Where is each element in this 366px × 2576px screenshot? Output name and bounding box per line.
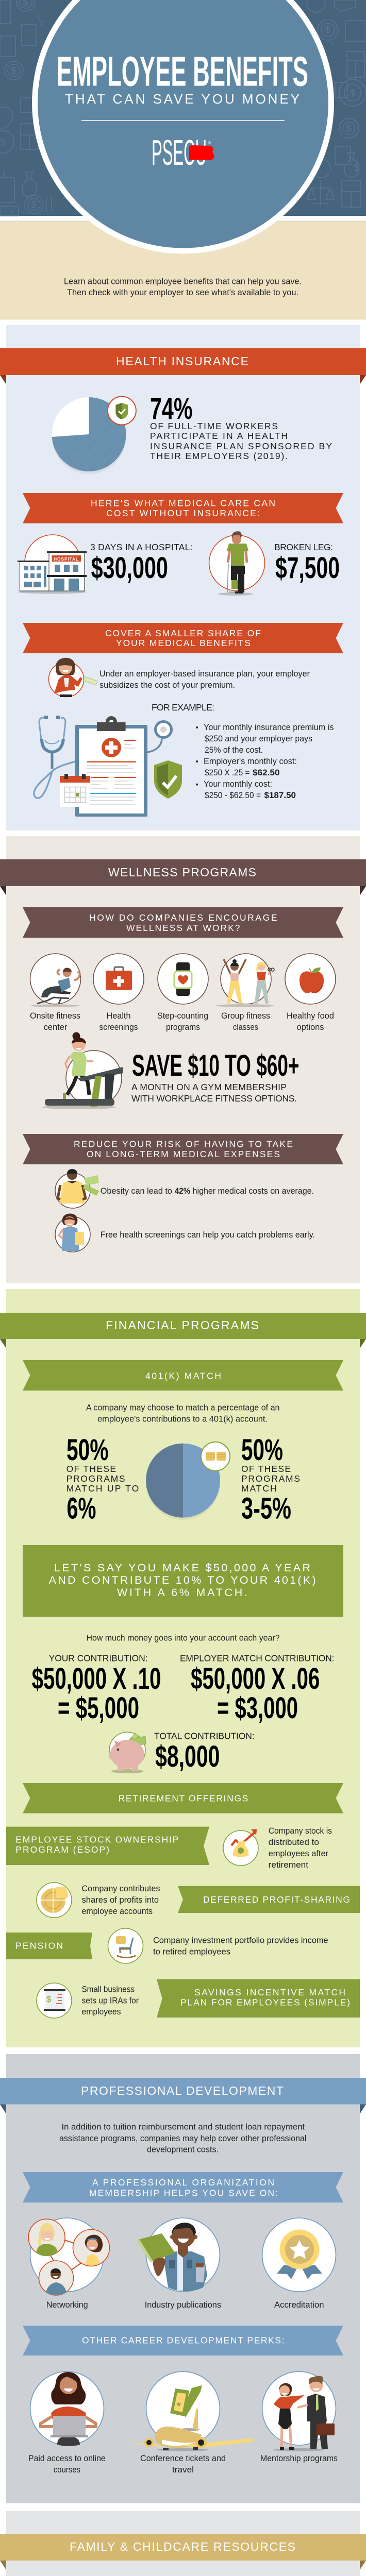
text: obesity cost: higher medical costs on average. — [193, 1187, 314, 1196]
subtitle: THAT CAN SAVE YOU MONEY — [65, 91, 300, 107]
pie chart: 50 50 — [146, 1444, 220, 1520]
labels: career perks — [28, 2454, 338, 2475]
example calculation list — [196, 723, 334, 800]
stat: match up to 6 percent: PROGRAMS — [66, 1473, 125, 1484]
labels: membership savings: Networking — [46, 2300, 88, 2310]
banner: membership helps — [23, 2172, 343, 2202]
labels: career perks: travel — [172, 2465, 194, 2475]
banner: other career perks: OTHER CAREER DEVELOPMENT PERKS: — [82, 2335, 285, 2346]
ribbon: family and childcare — [0, 2534, 366, 2570]
ribbon: professional development — [0, 2078, 366, 2114]
intro background — [0, 221, 366, 320]
example calculation list: $250 - $62.50 = — [205, 791, 261, 800]
wellness option labels: Onsite fitness — [30, 1011, 80, 1021]
illustration: clipboard — [75, 716, 147, 817]
header banner: $ — [0, 137, 6, 148]
banner: other career perks — [23, 2326, 343, 2355]
tag: pension: PENSION — [15, 1941, 63, 1951]
hospital cost: 3 DAYS IN A HOSPITAL: — [90, 542, 193, 552]
text: question: How much money goes into your account each year? — [87, 1633, 279, 1642]
icon: money bag with rising arrow — [223, 1829, 258, 1866]
text: profit sharing description — [81, 1884, 160, 1916]
labels: membership savings: Industry publications — [145, 2300, 221, 2310]
ribbon: financial programs — [0, 1313, 366, 1348]
wellness option labels: screenings — [99, 1023, 138, 1032]
stat: match up to 6 percent: 50% — [66, 1433, 108, 1467]
icon: step-counting watch — [158, 954, 208, 1004]
header banner: $ — [31, 199, 37, 211]
banner: retirement offerings: RETIREMENT OFFERINGS — [119, 1793, 248, 1804]
icon: group fitness classes — [215, 954, 274, 1007]
banner: 401(k) match: 401(K) MATCH — [145, 1371, 221, 1381]
example calculation list: Employer's monthly cost: — [204, 757, 297, 766]
icon: man with broken leg — [209, 531, 265, 596]
calculation: employer contribution — [180, 1653, 334, 1725]
banner: medical care cost: HERE'S WHAT MEDICAL CARE CAN — [91, 498, 275, 508]
tag: deferred profit-sharing: DEFERRED PROFIT-SHARING — [203, 1894, 350, 1905]
text: professional development intro: assistance programs, companies may help cover other professional — [59, 2134, 306, 2143]
stat: total contribution: $8,000 — [155, 1740, 220, 1773]
text: professional development intro: development costs. — [147, 2145, 219, 2155]
stat: 74 percent — [150, 392, 332, 461]
banner: retirement offerings — [23, 1783, 343, 1814]
banner: smaller share: YOUR MEDICAL BENEFITS — [116, 638, 251, 648]
text: professional development intro — [59, 2122, 306, 2155]
calculation: employer contribution: = $3,000 — [217, 1691, 298, 1725]
text: obesity cost: Obesity can lead to — [101, 1187, 172, 1196]
text: obesity cost — [101, 1187, 314, 1196]
calculation: your contribution: $50,000 X .10 — [32, 1662, 161, 1696]
hospital cost: $30,000 — [91, 551, 168, 585]
example calculation list: $250 and your employer pays — [205, 734, 312, 743]
illustration: stethoscope — [34, 716, 171, 798]
banner: 401(k) match — [23, 1360, 343, 1391]
panel: family and childcare — [0, 2511, 366, 2576]
icon: IRA chart board — [37, 1983, 72, 2018]
labels: career perks: Mentorship programs — [260, 2454, 338, 2463]
tag: ESOP: EMPLOYEE STOCK OWNERSHIP — [15, 1835, 178, 1845]
text: ESOP description: employees after — [269, 1849, 328, 1858]
banner: reduce risk: REDUCE YOUR RISK OF HAVING TO TAKE — [74, 1139, 293, 1149]
callout: example contribution: WITH A 6% MATCH. — [117, 1586, 247, 1599]
broken leg cost: $7,500 — [275, 551, 340, 585]
labels: membership savings: Accreditation — [274, 2300, 324, 2310]
banner: encourage wellness: WELLNESS AT WORK? — [126, 923, 240, 933]
wellness option labels: Health — [106, 1011, 131, 1021]
PSECU logo: PSECU — [152, 132, 207, 173]
icon: woman with laptop — [30, 2371, 104, 2446]
stat: match up to 6 percent: 6% — [67, 1492, 96, 1525]
wellness option labels: Healthy food — [287, 1011, 334, 1021]
banner: reduce risk — [23, 1134, 343, 1164]
stat: match up to 6 percent — [66, 1433, 139, 1525]
text: 401(k) description — [86, 1403, 279, 1424]
stat: match 3-5 percent: MATCH — [241, 1483, 277, 1494]
header banner: $ — [354, 162, 359, 174]
calculation: your contribution: = $5,000 — [58, 1691, 139, 1725]
ribbon: health insurance — [0, 348, 366, 384]
text: ESOP description — [269, 1826, 332, 1870]
text: professional development intro: In addition to tuition reimbursement and student loan repayment — [62, 2122, 305, 2131]
icon: woman with cheque — [48, 658, 97, 697]
ribbon: family and childcare: FAMILY & CHILDCARE RESOURCES — [70, 2540, 295, 2553]
broken leg cost — [274, 542, 340, 585]
header banner — [0, 0, 366, 216]
icon: shield badge — [108, 397, 136, 425]
header banner: $ — [346, 123, 352, 134]
example calculation list: Your monthly insurance premium is — [204, 723, 334, 732]
labels: membership savings — [46, 2300, 324, 2310]
text: pension description: Company investment portfolio provides income — [153, 1936, 328, 1945]
pie chart: 74 percent — [52, 397, 126, 474]
text: SIMPLE description — [81, 1985, 139, 2016]
banner: encourage wellness — [23, 907, 343, 938]
text: SIMPLE description: employees — [81, 2007, 121, 2016]
wellness option labels — [30, 1011, 334, 1032]
icon: hospital — [18, 535, 87, 594]
header banner: $ — [350, 88, 355, 99]
icon: coins badge — [201, 1442, 230, 1471]
icon: conference tickets and plane — [127, 2371, 254, 2451]
tag: SIMPLE: SAVINGS INCENTIVE MATCH — [194, 1987, 345, 1997]
tag: SIMPLE: PLAN FOR EMPLOYEES (SIMPLE) — [180, 1997, 350, 2007]
text: employer subsidy: subsidizes the cost of your premium. — [99, 681, 235, 690]
text: 401(k) description: employee's contributions to a 401(k) account. — [97, 1415, 268, 1424]
calculation: your contribution: YOUR CONTRIBUTION: — [49, 1653, 148, 1664]
wellness option labels: programs — [166, 1023, 200, 1032]
text: pension description — [153, 1936, 328, 1957]
text: employer subsidy — [99, 669, 310, 690]
PSECU logo — [152, 132, 214, 173]
stat: match 3-5 percent: 50% — [241, 1433, 283, 1467]
wellness option labels: center — [43, 1023, 68, 1032]
text: profit sharing description: shares of profits into — [81, 1895, 159, 1905]
text: obesity cost: 42% — [175, 1187, 190, 1196]
wellness option labels: options — [297, 1023, 324, 1032]
stat: 74 percent: THEIR EMPLOYERS (2019). — [150, 451, 288, 461]
stat: match 3-5 percent: OF THESE — [241, 1464, 291, 1474]
callout: example contribution — [23, 1545, 343, 1617]
illustration: shield — [154, 760, 182, 799]
text: profit sharing description: Company contributes — [81, 1884, 160, 1893]
wellness option labels: Step-counting — [157, 1011, 208, 1021]
banner: reduce risk: ON LONG-TERM MEDICAL EXPENSES — [87, 1149, 280, 1159]
title circle — [32, 0, 334, 253]
example calculation list: Your monthly cost: — [204, 779, 272, 789]
text: pension description: to retired employees — [153, 1947, 230, 1957]
stat: total contribution: TOTAL CONTRIBUTION: — [154, 1731, 255, 1741]
labels: career perks: courses — [54, 2465, 80, 2475]
stat: match 3-5 percent — [241, 1433, 300, 1525]
text: 401(k) description: A company may choose to match a percentage of an — [86, 1403, 279, 1413]
icon: conference tickets and plane: ★ — [176, 2400, 182, 2408]
intro text — [64, 277, 302, 297]
banner: encourage wellness: HOW DO COMPANIES ENCOURAGE — [89, 912, 277, 923]
ribbon: wellness programs — [0, 859, 366, 895]
intro text: Learn about common employee benefits that can help you save. — [64, 277, 302, 286]
label: for example: FOR EXAMPLE: — [152, 702, 214, 713]
icon: coin pie — [37, 1883, 72, 1918]
stat: match 3-5 percent: PROGRAMS — [241, 1473, 300, 1484]
banner: membership helps: A PROFESSIONAL ORGANIZATION — [92, 2177, 274, 2188]
callout: example contribution: LET'S SAY YOU MAKE $50,000 A YEAR — [54, 1562, 310, 1574]
banner: medical care cost: COST WITHOUT INSURANCE: — [106, 508, 260, 518]
intro text: Then check with your employer to see what's available to you. — [67, 288, 298, 297]
stat: 74 percent: INSURANCE PLAN SPONSORED BY — [150, 441, 332, 451]
stat: gym savings — [131, 1049, 299, 1104]
banner: smaller share — [23, 623, 343, 653]
illustration: woman on treadmill — [42, 1032, 123, 1109]
text: employer subsidy: Under an employer-based insurance plan, your employer — [99, 669, 310, 679]
header banner: $ — [325, 25, 330, 36]
example calculation list: 25% of the cost. — [205, 745, 263, 755]
illustration: calendar — [60, 774, 90, 807]
calculation: employer contribution: EMPLOYER MATCH CONTRIBUTION: — [180, 1653, 334, 1664]
icon: health screenings kit — [93, 954, 144, 1004]
icon: IRA chart board: $ — [46, 1994, 52, 2004]
callout: example contribution: AND CONTRIBUTE 10% TO YOUR 401(K) — [49, 1574, 316, 1586]
tag: ESOP — [6, 1827, 209, 1865]
icon: rocking chair with coins — [108, 1928, 143, 1963]
banner: medical care cost — [23, 493, 343, 523]
text: ESOP description: Company stock is — [269, 1826, 332, 1836]
stat: 74 percent: 74% — [150, 392, 193, 426]
wellness option labels: classes — [233, 1023, 258, 1032]
icon: nurse — [55, 1214, 90, 1252]
icon: piggy bank with cash — [109, 1732, 146, 1773]
stat: gym savings: WITH WORKPLACE FITNESS OPTIONS. — [131, 1093, 297, 1104]
broken leg cost: BROKEN LEG: — [274, 542, 333, 552]
ribbon: financial programs: FINANCIAL PROGRAMS — [106, 1318, 259, 1332]
icon: man with money — [55, 1169, 99, 1208]
icon: healthy food apple — [285, 954, 336, 1004]
icon: accreditation medal — [262, 2218, 336, 2292]
calculation: your contribution — [32, 1653, 161, 1725]
ribbon: wellness programs: WELLNESS PROGRAMS — [108, 866, 256, 879]
banner: smaller share: COVER A SMALLER SHARE OF — [105, 628, 261, 638]
text: free screenings: Free health screenings can help you catch problems early. — [101, 1230, 315, 1240]
tag: SIMPLE — [157, 1979, 360, 2018]
ribbon: professional development: PROFESSIONAL DEVELOPMENT — [81, 2084, 284, 2097]
text: profit sharing description: employee accounts — [81, 1907, 153, 1916]
icon: mentorship pair — [262, 2371, 336, 2451]
banner: membership helps: MEMBERSHIP HELPS YOU SAVE ON: — [89, 2188, 278, 2198]
stat: 74 percent: OF FULL-TIME WORKERS — [150, 421, 278, 431]
stat: match up to 6 percent: MATCH UP TO — [66, 1483, 139, 1494]
panel: professional development — [0, 2054, 366, 2503]
labels: career perks: Paid access to online — [28, 2454, 106, 2463]
panel: health insurance — [0, 325, 366, 831]
text: SIMPLE description: Small business — [81, 1985, 135, 1994]
wellness option labels: Group fitness — [221, 1011, 270, 1021]
header banner: $ — [11, 65, 16, 77]
tag: deferred profit-sharing — [178, 1886, 360, 1913]
example calculation list: $250 X .25 = — [205, 768, 249, 777]
panel: financial programs — [0, 1289, 366, 2047]
example calculation list: $62.50 — [253, 768, 279, 777]
icon: industry publications — [137, 2218, 220, 2292]
text: ESOP description: distributed to — [269, 1838, 319, 1847]
panel: wellness programs — [0, 836, 366, 1283]
PSECU logo: ® — [208, 141, 211, 145]
tag: pension — [6, 1933, 92, 1959]
stat: gym savings: A MONTH ON A GYM MEMBERSHIP — [131, 1082, 287, 1092]
labels: career perks: Conference tickets and — [140, 2454, 226, 2463]
icon: networking — [28, 2218, 109, 2295]
icon: hospital: HOSPITAL — [54, 556, 78, 562]
tag: ESOP: PROGRAM (ESOP) — [15, 1844, 109, 1855]
text: SIMPLE description: sets up IRAs for — [81, 1996, 139, 2005]
example calculation list: $187.50 — [264, 791, 296, 800]
text: ESOP description: retirement — [269, 1860, 308, 1870]
ribbon: health insurance: HEALTH INSURANCE — [116, 354, 248, 368]
stat: 74 percent: PARTICIPATE IN A HEALTH — [150, 431, 288, 441]
icon: onsite fitness center — [30, 954, 80, 1007]
stat: match 3-5 percent: 3-5% — [241, 1492, 291, 1525]
stat: match up to 6 percent: OF THESE — [66, 1464, 116, 1474]
